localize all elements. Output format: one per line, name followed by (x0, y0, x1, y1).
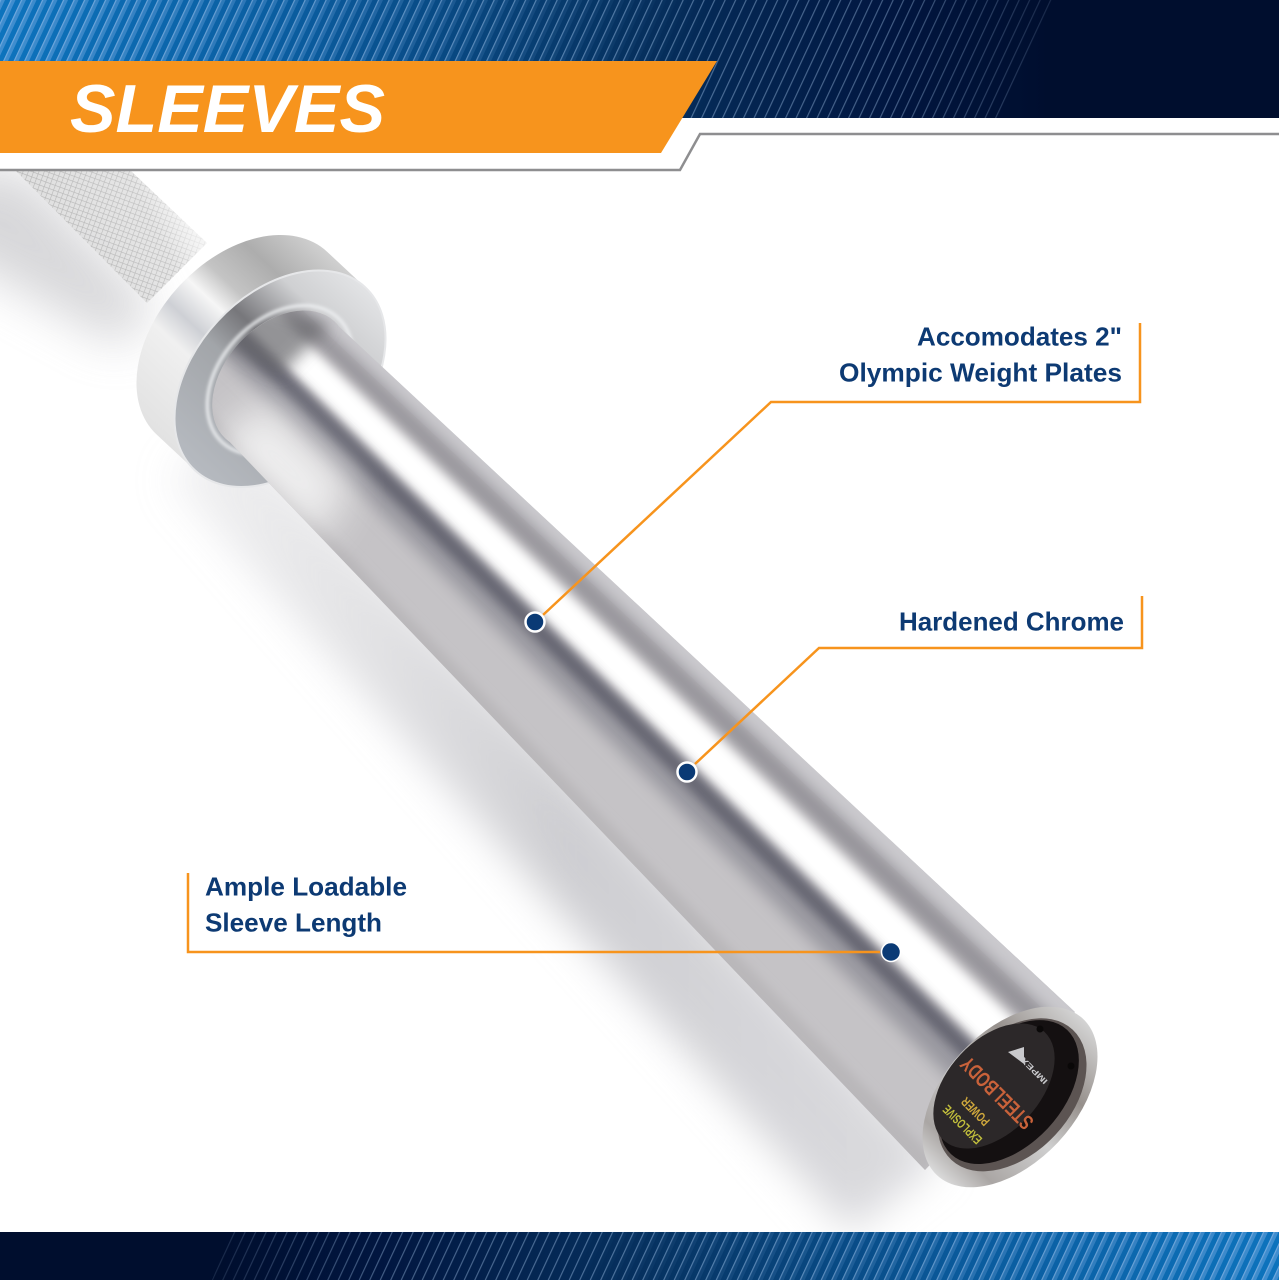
inner insert disc (910, 1001, 1078, 1171)
logo mark: IMPEX (1019, 1055, 1050, 1086)
title text: SLEEVES (70, 71, 385, 147)
header white cut (0, 118, 1279, 170)
collar front face (133, 229, 427, 528)
inner bore (912, 994, 1106, 1190)
inner bore wall (908, 989, 1116, 1200)
brand text: STEELBODY (956, 1052, 1038, 1134)
dark reflection falloff (224, 346, 962, 1078)
lower body edge (216, 422, 928, 1170)
title banner (0, 61, 717, 153)
main dark reflection (234, 332, 976, 1058)
collar body (95, 194, 427, 528)
knurled bar shaft (15, 170, 207, 303)
sleeve end cap (889, 974, 1131, 1220)
footer band (0, 1232, 1279, 1280)
white highlight (250, 314, 1016, 1041)
header band (0, 0, 1279, 118)
callout: sleeve length (188, 872, 900, 962)
sleeve base tone (212, 315, 1075, 1170)
callout: hardened chrome: Hardened Chrome (899, 606, 1124, 636)
header grey outline (0, 134, 1279, 170)
callout: sleeve length: Ample Loadable (205, 872, 407, 902)
chrome sleeve (212, 310, 1075, 1170)
callout: olympic plates: Accomodates 2" (917, 322, 1122, 352)
insert screw holes (1036, 1026, 1074, 1070)
weight collar (95, 194, 427, 528)
collar end glow (215, 400, 350, 540)
logo mark (1008, 1047, 1050, 1086)
power text: POWER (958, 1094, 993, 1129)
upper edge tone (383, 368, 1010, 952)
shaded top near collar (230, 310, 332, 374)
upper dark reflection (282, 310, 1052, 1015)
cast shadow under bar (0, 170, 940, 1232)
callout: olympic plates: Olympic Weight Plates (839, 358, 1122, 388)
bar fillet highlight (178, 277, 382, 483)
callout: sleeve length: Sleeve Length (205, 908, 382, 938)
explosive text: EXPLOSIVE (940, 1102, 985, 1147)
callout: olympic plates (526, 322, 1140, 632)
callout: hardened chrome (678, 596, 1142, 782)
outer chrome ring (889, 974, 1131, 1220)
